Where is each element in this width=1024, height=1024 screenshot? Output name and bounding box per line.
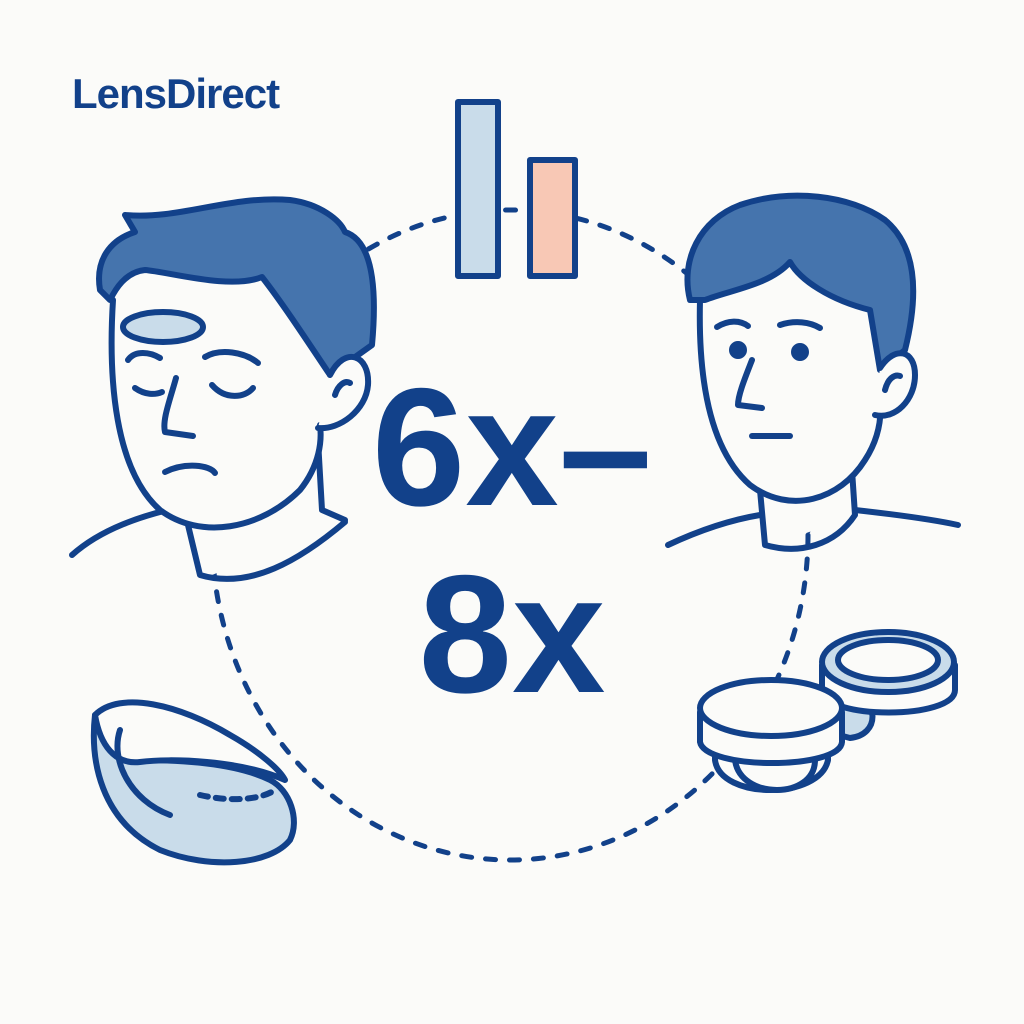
- icon: lens case: [700, 632, 955, 790]
- big number: [372, 353, 652, 728]
- right face: neutral: [668, 196, 958, 549]
- dashed circle: [212, 210, 808, 860]
- left face: tired: [72, 195, 375, 580]
- logo: LensDirect: [72, 70, 280, 117]
- text backdrop: [345, 330, 675, 710]
- bar chart: [458, 102, 575, 276]
- icon: contact lens: [94, 702, 294, 862]
- big number: 8x: [419, 540, 605, 728]
- big number: 6x–: [372, 353, 652, 541]
